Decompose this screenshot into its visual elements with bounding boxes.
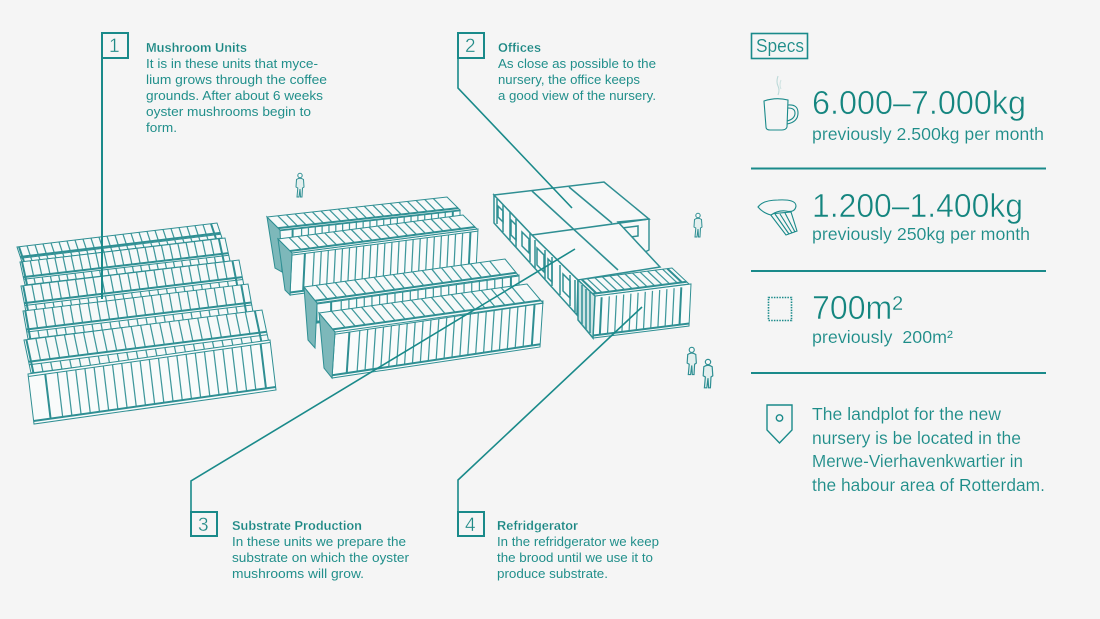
text: location: nursery is be located in the [812, 428, 1021, 448]
heading: specs: Specs [756, 36, 804, 56]
callout 1: mushroom units [102, 33, 327, 299]
text: mushroom units description: lium grows through the coffee [146, 72, 327, 87]
stat: coffee grounds: 6.000–7.000kg [812, 84, 1026, 121]
heading: substrate production: Substrate Production [232, 518, 362, 533]
heading: refridgerator: Refridgerator [497, 518, 578, 533]
text: refridgerator description: In the refridgerator we keep [497, 534, 659, 549]
callout 3: substrate production [191, 249, 575, 581]
text: offices description: nursery, the office keeps [498, 72, 640, 87]
stat: area: 700m² [812, 289, 903, 326]
text: location: The landplot for the new [812, 404, 1001, 424]
icon: coffee cup [764, 76, 798, 130]
text: substrate description: In these units we prepare the [232, 534, 406, 549]
stat: mushrooms: 1.200–1.400kg [812, 187, 1023, 224]
heading: mushroom units: Mushroom Units [146, 40, 247, 55]
stat: area: previously 200m² [812, 327, 953, 347]
heading: offices: Offices [498, 40, 541, 55]
text: offices description: a good view of the nursery. [498, 88, 656, 103]
text: mushroom units description: oyster mushrooms begin to [146, 104, 311, 119]
text: refridgerator description [497, 534, 659, 581]
text: mushroom units description [146, 56, 327, 135]
text: mushroom units description: grounds. After about 6 weeks [146, 88, 324, 103]
text: offices description [498, 56, 656, 103]
stat: area [812, 289, 953, 347]
text: mushroom units description: It is in these units that myce- [146, 56, 318, 71]
illustration: substrate production containers [267, 197, 543, 378]
text: mushroom units description: form. [146, 120, 177, 135]
figure: person [703, 359, 713, 388]
illustration: office building [494, 182, 660, 315]
illustration: mushroom units containers [17, 223, 276, 424]
callout 2: offices: 2 [465, 36, 476, 57]
icon: location pin [767, 405, 792, 443]
callout 4: refrigerator: 4 [465, 515, 476, 536]
stat: coffee grounds: previously 2.500kg per month [812, 124, 1044, 144]
callout 2: offices [458, 33, 656, 208]
figure: person [687, 347, 696, 375]
text: substrate description: mushrooms will grow. [232, 566, 364, 581]
callout 1: mushroom units: 1 [109, 36, 120, 57]
text: substrate description: substrate on which the oyster [232, 550, 410, 565]
stat: coffee grounds [812, 84, 1044, 144]
figure: person [694, 213, 702, 237]
callout 4: refrigerator [458, 307, 659, 581]
stat: mushrooms [812, 187, 1030, 244]
text: location: Merwe-Vierhavenkwartier in [812, 451, 1023, 471]
icon: oyster mushroom [758, 200, 797, 235]
text: refridgerator description: the brood until we use it to [497, 550, 653, 565]
text: refridgerator description: produce substrate. [497, 566, 608, 581]
icon: dotted square [768, 298, 792, 320]
text: location: the habour area of Rotterdam. [812, 475, 1045, 495]
text: location [812, 404, 1045, 495]
illustration: refrigerator container [578, 268, 691, 338]
figure: person [296, 173, 304, 197]
text: substrate description [232, 534, 410, 581]
text: offices description: As close as possible to the [498, 56, 656, 71]
stat: mushrooms: previously 250kg per month [812, 224, 1030, 244]
callout 3: substrate production: 3 [198, 515, 209, 536]
